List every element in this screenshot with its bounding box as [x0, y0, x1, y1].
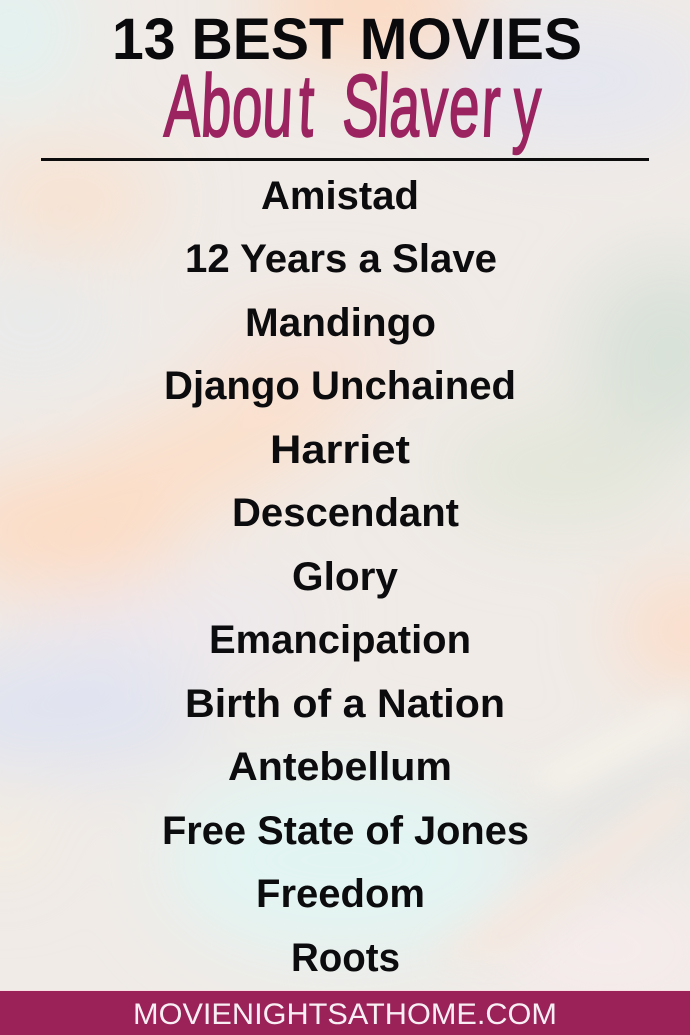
footer website text: MOVIENIGHTSATHOME.COM — [133, 998, 557, 1031]
movie: Mandingo: Mandingo — [245, 301, 436, 345]
movie: Roots: Roots — [291, 936, 400, 980]
divider rule — [41, 158, 649, 161]
subheading: About Slavery: About — [163, 57, 316, 155]
title — [112, 7, 582, 155]
subheading: About Slavery: Slavery — [341, 57, 543, 155]
movie: Emancipation: Emancipation — [209, 618, 471, 662]
movie list — [162, 174, 529, 980]
heading: 13 BEST MOVIES: 13 BEST MOVIES — [112, 7, 582, 72]
movie: Antebellum: Antebellum — [228, 745, 452, 789]
movie: Descendant: Descendant — [232, 491, 459, 535]
movie: Glory: Glory — [292, 555, 398, 599]
movie: Harriet: Harriet — [270, 428, 410, 472]
movie: Birth of a Nation: Birth of a Nation — [185, 682, 505, 726]
movie: Amistad: Amistad — [261, 174, 419, 218]
movie: Freedom: Freedom — [256, 872, 425, 916]
footer banner — [0, 990, 690, 1035]
movie: 12 Years a Slave: 12 Years a Slave — [185, 237, 497, 281]
subheading: About Slavery — [163, 57, 543, 155]
movie: Free State of Jones: Free State of Jones — [162, 809, 529, 853]
movie: Django Unchained: Django Unchained — [164, 364, 516, 408]
